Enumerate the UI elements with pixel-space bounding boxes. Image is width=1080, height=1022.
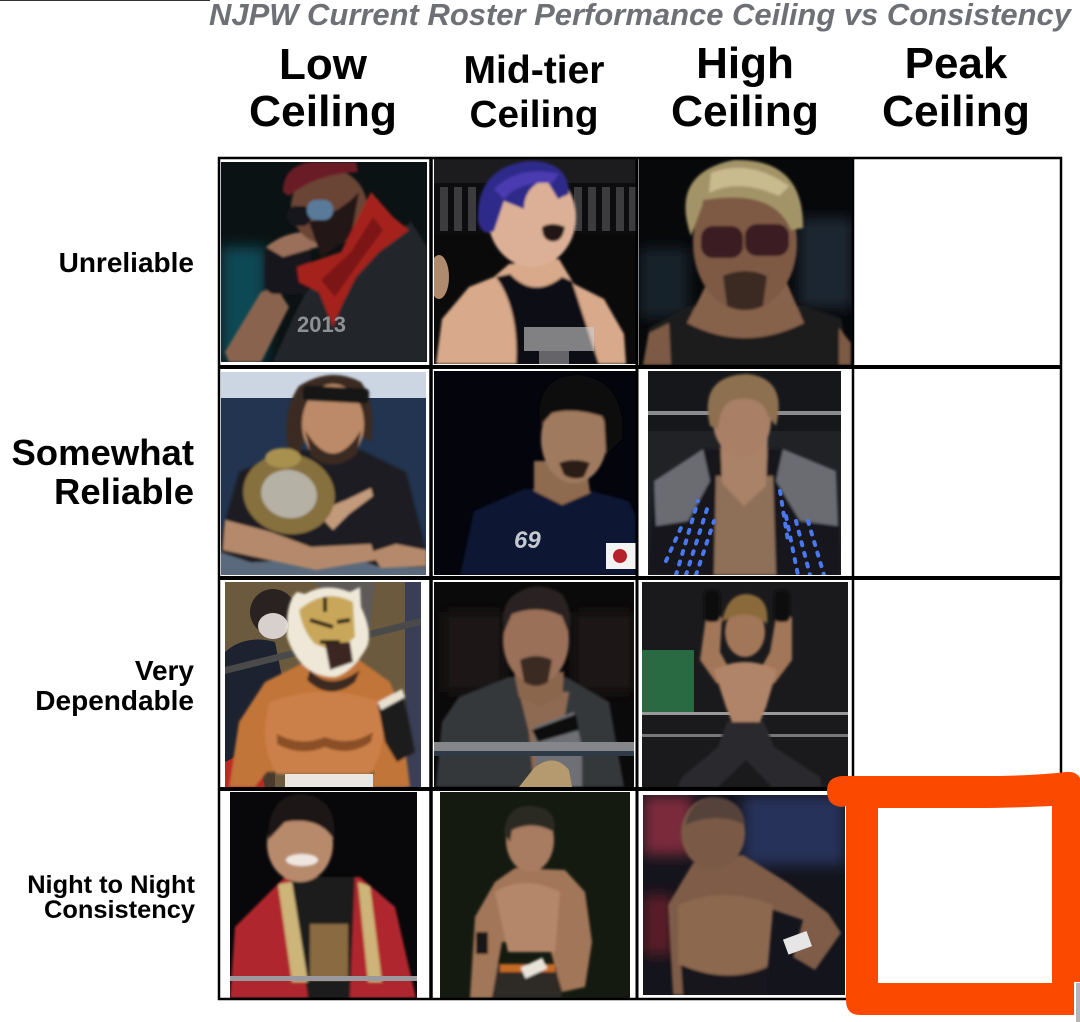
photo: shirtless wrestler on dark green (440, 792, 630, 998)
heading: mid-tier ceiling: Ceiling (470, 94, 598, 136)
heading: peak ceiling (882, 39, 1030, 136)
photo: tiger mask wrestler (225, 582, 421, 787)
photo: purple hair wrestler (429, 159, 636, 364)
heading: low ceiling: Low (279, 40, 368, 89)
heading: high ceiling: High (696, 39, 794, 88)
label: unreliable: Unreliable (59, 247, 194, 278)
photo: red jacket wrestler (230, 792, 417, 998)
top-left edge line (0, 0, 210, 1)
heading: high ceiling: Ceiling (671, 87, 819, 136)
label: somewhat reliable: Reliable (54, 471, 194, 512)
heading: peak ceiling: Peak (905, 39, 1008, 88)
grid (218, 157, 1061, 999)
label: somewhat reliable: Somewhat (11, 432, 194, 473)
label: night to night consistency (27, 871, 196, 924)
label: night to night consistency: Night to Night (27, 871, 196, 899)
photo: blond hair sunglasses wrestler (639, 158, 853, 365)
photo: black leather jacket wrestler (434, 582, 634, 787)
photo: arms raised wrestler (642, 582, 848, 787)
heading: mid-tier ceiling (464, 49, 604, 136)
column headings (249, 39, 1030, 136)
label: somewhat reliable (11, 432, 194, 512)
photo: number 69 shirt wrestler (434, 371, 636, 575)
label: very dependable (35, 655, 194, 716)
right-edge grey strip (1076, 983, 1080, 1022)
label: night to night consistency: Consistency (44, 896, 195, 924)
heading: high ceiling (671, 39, 819, 136)
photo: headband wrestler with belt (221, 372, 426, 575)
label: very dependable: Dependable (35, 685, 194, 716)
photo: stocky wrestler with wrist tape (643, 795, 845, 995)
hand-drawn orange square (827, 772, 1080, 1015)
heading: low ceiling (249, 40, 397, 136)
row labels (11, 247, 196, 924)
photo: number 69 shirt wrestler: 69 (514, 527, 541, 554)
heading: mid-tier ceiling: Mid-tier (464, 49, 604, 92)
photo: spiked jacket wrestler (648, 371, 841, 575)
label: very dependable: Very (135, 655, 194, 686)
photo: beret and red scarf wrestler: 2013 (297, 312, 346, 337)
heading: low ceiling: Ceiling (249, 87, 397, 136)
heading: peak ceiling: Ceiling (882, 87, 1030, 136)
photo: beret and red scarf wrestler (221, 162, 427, 362)
